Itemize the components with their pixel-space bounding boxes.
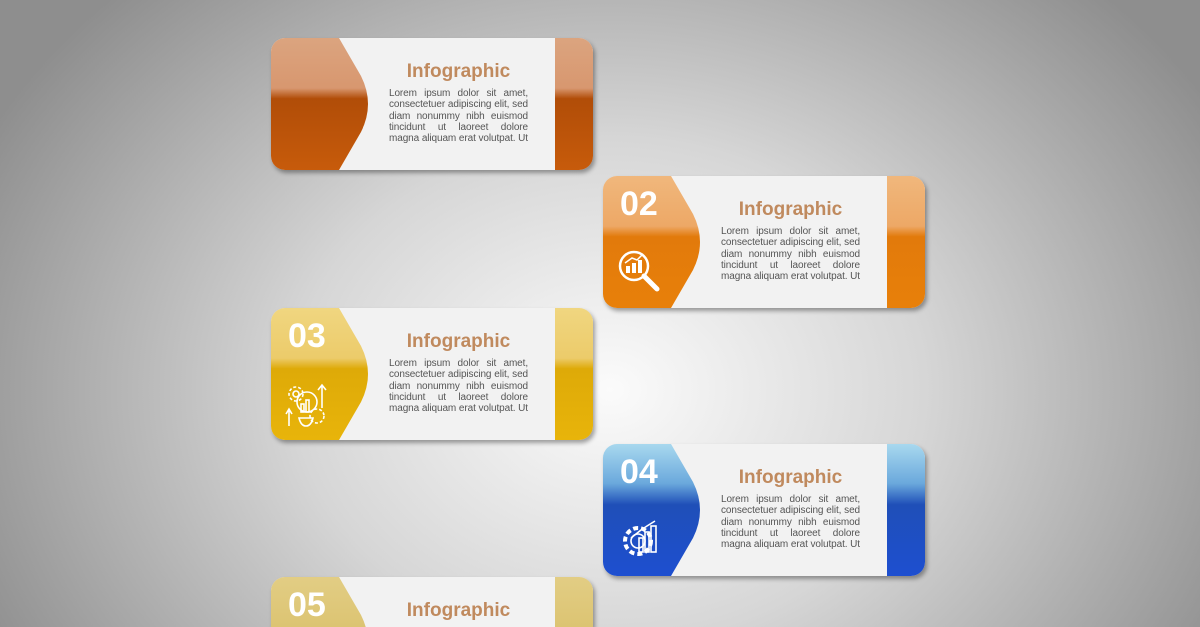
- title 4: Infographic: [739, 467, 842, 488]
- card 2: [602, 176, 930, 314]
- card 4: [602, 444, 930, 582]
- title 1: Infographic: [407, 61, 510, 82]
- number 05: 05: [288, 586, 326, 624]
- icon: gear chart: [623, 520, 657, 556]
- text 3: Lorem ipsum dolor sit amet, consectetuer adipiscing elit, sed diam nonummy nibh euismod tincidunt ut laoreet dolore magna aliquam erat volutpat. Ut: [389, 358, 528, 414]
- title 5: Infographic: [407, 600, 510, 621]
- title 3: Infographic: [407, 331, 510, 352]
- text 4: Lorem ipsum dolor sit amet, consectetuer adipiscing elit, sed diam nonummy nibh euismod tincidunt ut laoreet dolore magna aliquam erat volutpat. Ut: [721, 494, 860, 550]
- icon: gears growth: [285, 384, 326, 427]
- card 3: [270, 308, 598, 446]
- card 5: [270, 577, 598, 627]
- text 1: Lorem ipsum dolor sit amet, consectetuer adipiscing elit, sed diam nonummy nibh euismod tincidunt ut laoreet dolore magna aliquam erat volutpat. Ut: [389, 88, 528, 144]
- number 04: 04: [620, 453, 658, 491]
- text 2: Lorem ipsum dolor sit amet, consectetuer adipiscing elit, sed diam nonummy nibh euismod tincidunt ut laoreet dolore magna aliquam erat volutpat. Ut: [721, 226, 860, 282]
- title 2: Infographic: [739, 199, 842, 220]
- number 03: 03: [288, 317, 326, 355]
- icon: magnifier chart: [618, 250, 660, 292]
- card 1: [270, 38, 598, 176]
- number 02: 02: [620, 185, 658, 223]
